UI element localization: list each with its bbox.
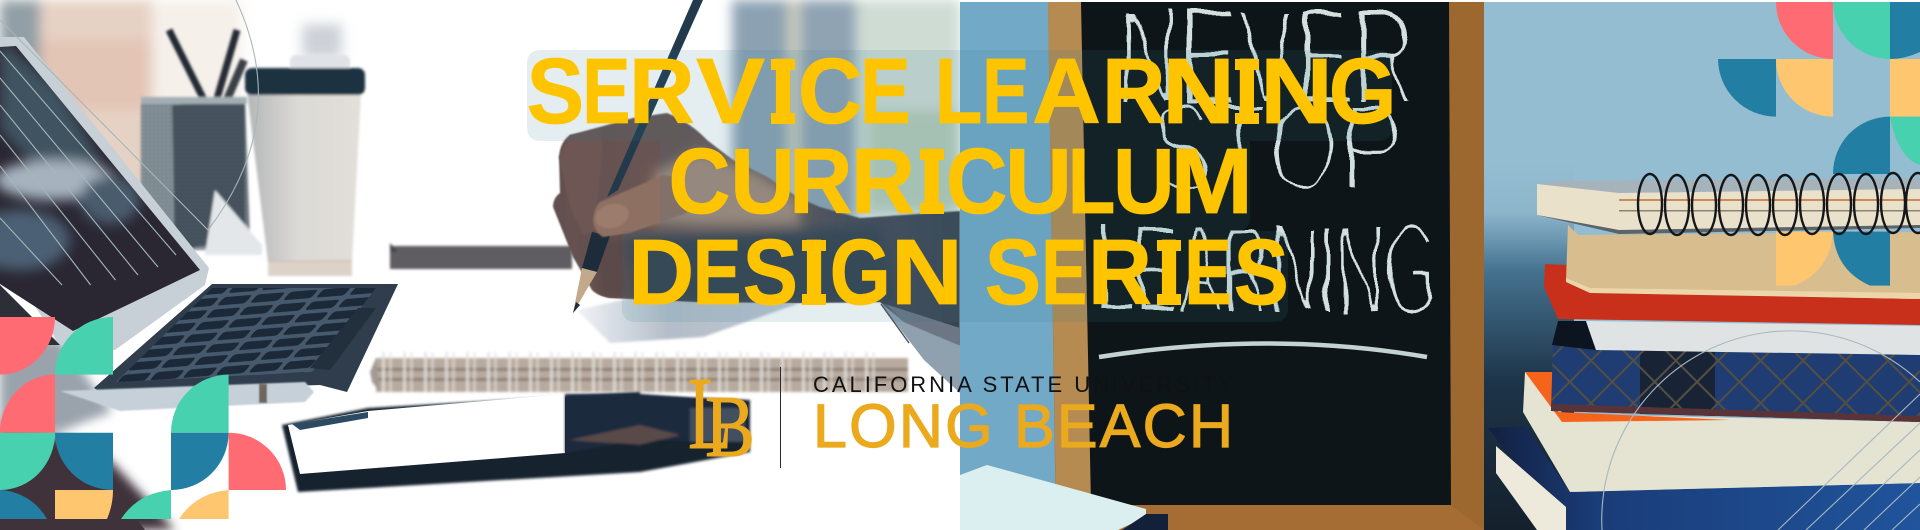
spiral notebook on desk (370, 352, 908, 392)
blurred background wall (0, 0, 960, 230)
title line 1: E (982, 39, 1029, 143)
geometric shapes top right (1718, 2, 1920, 286)
smartphone (282, 392, 750, 492)
geometric shapes bottom left (0, 317, 286, 519)
title line 1: A (1032, 39, 1101, 143)
slab serifs on the letter I (771, 59, 1259, 305)
title line 2: M (1170, 129, 1253, 233)
title line 2: U (730, 129, 795, 233)
title line 2: R (789, 129, 853, 233)
tablet (0, 37, 209, 350)
page block lower left (1496, 446, 1566, 530)
chalk writing: STOP (1150, 78, 1402, 217)
orange page edge (1525, 372, 1730, 422)
title line 1: L (935, 39, 982, 143)
bottom blue book (1488, 426, 1920, 530)
title line 2: L (1068, 129, 1115, 233)
logo: CSU Long Beach (688, 356, 1233, 476)
title line 2: U (1005, 129, 1072, 233)
notebook at bottom (960, 465, 1168, 530)
title line 2: C (946, 129, 1007, 233)
title line 1: C (798, 39, 863, 143)
hand shading (590, 150, 960, 345)
title line 3: I (801, 220, 827, 324)
chalkboard frame (1048, 2, 1484, 530)
paper edge (881, 304, 960, 393)
title line 2: R (851, 129, 915, 233)
title line 1: N (1260, 39, 1333, 143)
pen holder (141, 30, 262, 255)
white book (1586, 321, 1920, 355)
blue patterned book (1551, 343, 1920, 422)
notebook spiral binding (1638, 173, 1920, 235)
title line 1: R (1102, 39, 1166, 143)
chalk writing (1100, 8, 1432, 314)
title line 1: N (1162, 39, 1235, 143)
pencil (573, 0, 703, 313)
title line 3: N (891, 220, 963, 324)
wall on right (1484, 2, 1920, 530)
campus name: LONG BEACH (813, 392, 1233, 460)
title (527, 39, 1396, 324)
tan book (1566, 225, 1920, 299)
title line 1: V (696, 39, 765, 143)
title line 3: I (1156, 220, 1182, 324)
LB monogram: B (705, 379, 755, 476)
university name: CALIFORNIA STATE UNIVERSITY (813, 372, 1233, 397)
panel: desk photo (0, 0, 960, 530)
title line 2: C (668, 129, 730, 233)
title line 3: S (1234, 220, 1289, 324)
title line 2: U (1113, 129, 1175, 233)
title line 3: D (628, 220, 694, 324)
title line 3: E (693, 220, 741, 324)
spiral notebook pages (1537, 178, 1920, 234)
book stack (1488, 178, 1920, 530)
title line 1: G (1329, 39, 1396, 143)
thumb (592, 175, 687, 237)
chalk underline (1099, 344, 1427, 357)
decorative leaf outline and lines top left (0, 0, 258, 285)
wall shadow (1484, 212, 1574, 530)
decorative circle and lines (1602, 331, 1920, 530)
title line 1: E (860, 39, 911, 143)
title line 3: S (743, 220, 798, 324)
coffee cup (245, 55, 365, 276)
title line 3: G (830, 220, 891, 324)
table shadow at bottom left (0, 340, 175, 530)
title line 1: R (629, 39, 695, 143)
dark wedge (1552, 321, 1596, 350)
stylus (60, 382, 314, 411)
title line 1: I (1234, 39, 1260, 143)
title line 2: I (919, 129, 945, 233)
keyboard (94, 284, 398, 392)
index finger (558, 132, 594, 234)
logo divider (780, 367, 781, 468)
red book (1544, 264, 1920, 325)
chalkboard (1081, 2, 1451, 505)
title line 3: E (1184, 220, 1232, 324)
title line 1: E (582, 39, 630, 143)
title line 1: S (527, 39, 584, 143)
title line 1: I (770, 39, 796, 143)
hand shadow on paper (577, 296, 800, 343)
distant notebook (390, 243, 572, 269)
panel: chalkboard and books photo (960, 0, 1920, 530)
LB monogram: L (688, 356, 732, 471)
cream thick book (1523, 372, 1920, 492)
title line 3: R (1088, 220, 1152, 324)
chalk writing: LEARNING (1095, 196, 1437, 342)
title line 3: S (985, 220, 1041, 324)
title line 3: E (1041, 220, 1087, 324)
writing hand and arm (553, 0, 960, 345)
title backing panels (527, 50, 1392, 322)
